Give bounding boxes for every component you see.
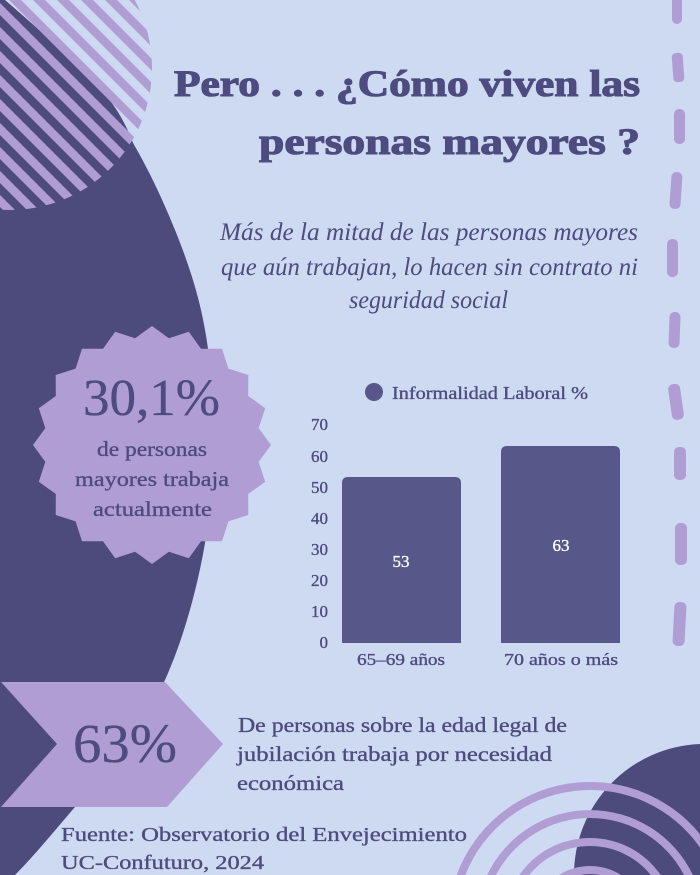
callout: 30,1% starburst: actualmente — [93, 497, 212, 521]
concentric rings, bottom right — [457, 782, 700, 875]
text block: jubilación — [236, 713, 567, 795]
title — [174, 64, 640, 163]
source note: UC-Confuturo, 2024 — [61, 852, 264, 874]
subtitle — [219, 219, 638, 314]
dark circle, bottom right — [574, 744, 700, 875]
bar: 65-69 años — [342, 477, 461, 643]
callout: 30,1% starburst: mayores trabaja — [75, 467, 230, 491]
callout: 63% arrow: 63% — [73, 713, 177, 774]
callout: 63% arrow — [1, 682, 223, 807]
text block: jubilación: De personas sobre la edad legal de — [238, 713, 567, 737]
y axis labels: 40 — [311, 509, 328, 528]
callout: 30,1% starburst: de personas — [97, 437, 207, 461]
y axis labels — [311, 415, 328, 652]
callout: 30,1% starburst — [33, 326, 271, 564]
y axis labels: 10 — [311, 602, 328, 621]
chart legend: Informalidad Laboral % — [392, 383, 588, 403]
y axis labels: 50 — [311, 478, 328, 497]
large dark background shape — [0, 0, 213, 875]
x axis label 2: 70 años o más — [504, 650, 618, 669]
y axis labels: 30 — [311, 540, 328, 559]
x axis label 1: 65–69 años — [357, 650, 445, 669]
bar: 70 años o más — [501, 446, 620, 643]
y axis labels: 0 — [320, 633, 328, 652]
text block: jubilación: jubilación trabaja por necesidad — [236, 742, 553, 766]
title: Pero . . . ¿Cómo viven las — [174, 64, 640, 105]
y axis labels: 60 — [311, 447, 328, 466]
source note: Fuente: Observatorio del Envejecimiento — [61, 824, 467, 846]
source note — [61, 824, 467, 874]
bar value 53: 53 — [392, 552, 410, 571]
title: personas mayores ? — [259, 122, 640, 163]
text block: jubilación: económica — [237, 771, 345, 795]
y axis labels: 20 — [311, 571, 328, 590]
bar chart: informalidad laboral — [311, 415, 620, 669]
callout: 30,1% starburst: 30,1% — [83, 370, 220, 427]
dashed vertical line, right edge — [667, 0, 687, 646]
y axis labels: 70 — [311, 415, 328, 434]
subtitle: que aún trabajan, lo hacen sin contrato ni — [221, 254, 638, 281]
subtitle: seguridad social — [349, 287, 508, 314]
subtitle: Más de la mitad de las personas mayores — [219, 219, 638, 246]
bar value 63: 63 — [552, 536, 570, 555]
striped circle, top left — [0, 0, 152, 210]
